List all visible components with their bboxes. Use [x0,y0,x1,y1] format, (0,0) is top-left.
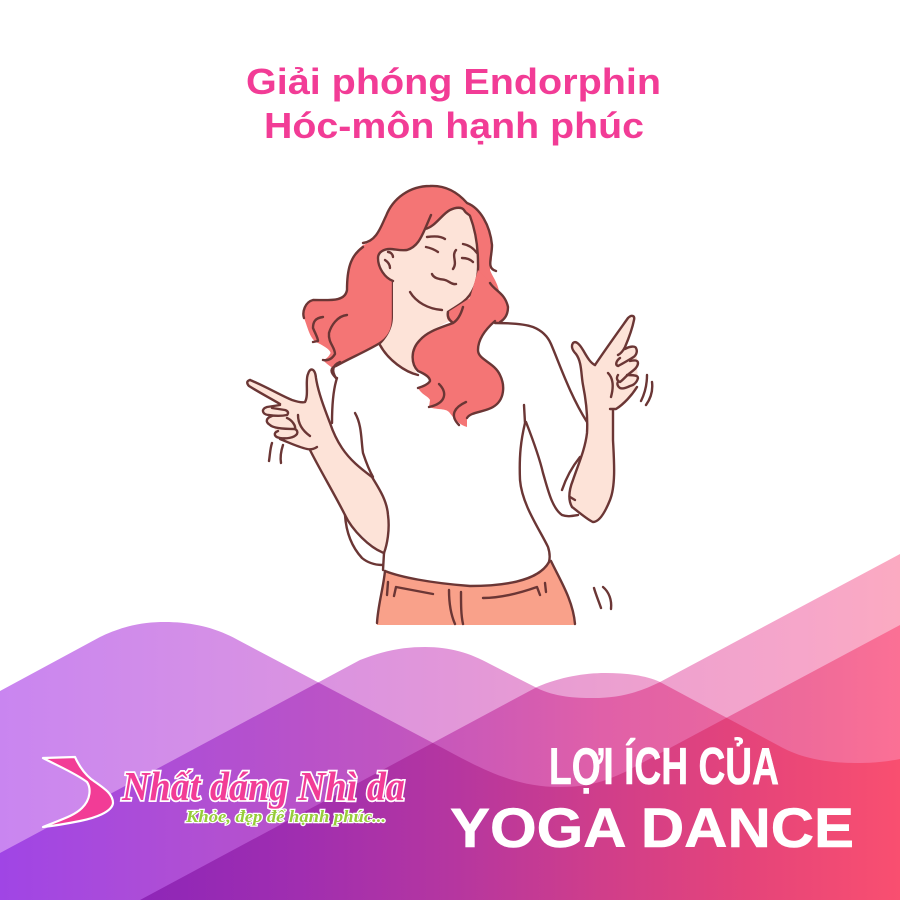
shirt outline [332,323,587,562]
title: Hóc-môn hạnh phúc [264,105,644,146]
hair back [303,186,500,378]
title [246,61,661,146]
logo tagline: Khỏe, đẹp để hạnh phúc... [185,807,386,826]
logo [43,757,405,827]
heading: benefits of yoga dance [450,737,854,859]
logo wordmark: Nhất dáng Nhì da [121,763,405,809]
title: Giải phóng Endorphin [246,61,661,102]
illustration: dancing woman [247,186,652,625]
face and neck [378,208,478,376]
hair front lock [413,270,509,427]
heading: benefits of yoga dance: YOGA DANCE [450,796,854,859]
pants [377,561,575,625]
right arm and pointing hand [562,316,652,609]
logo mark [43,757,113,827]
left arm and pointing hand [247,369,389,570]
wave background [0,540,900,900]
heading: benefits of yoga dance: LỢI ÍCH CỦA [549,737,779,796]
